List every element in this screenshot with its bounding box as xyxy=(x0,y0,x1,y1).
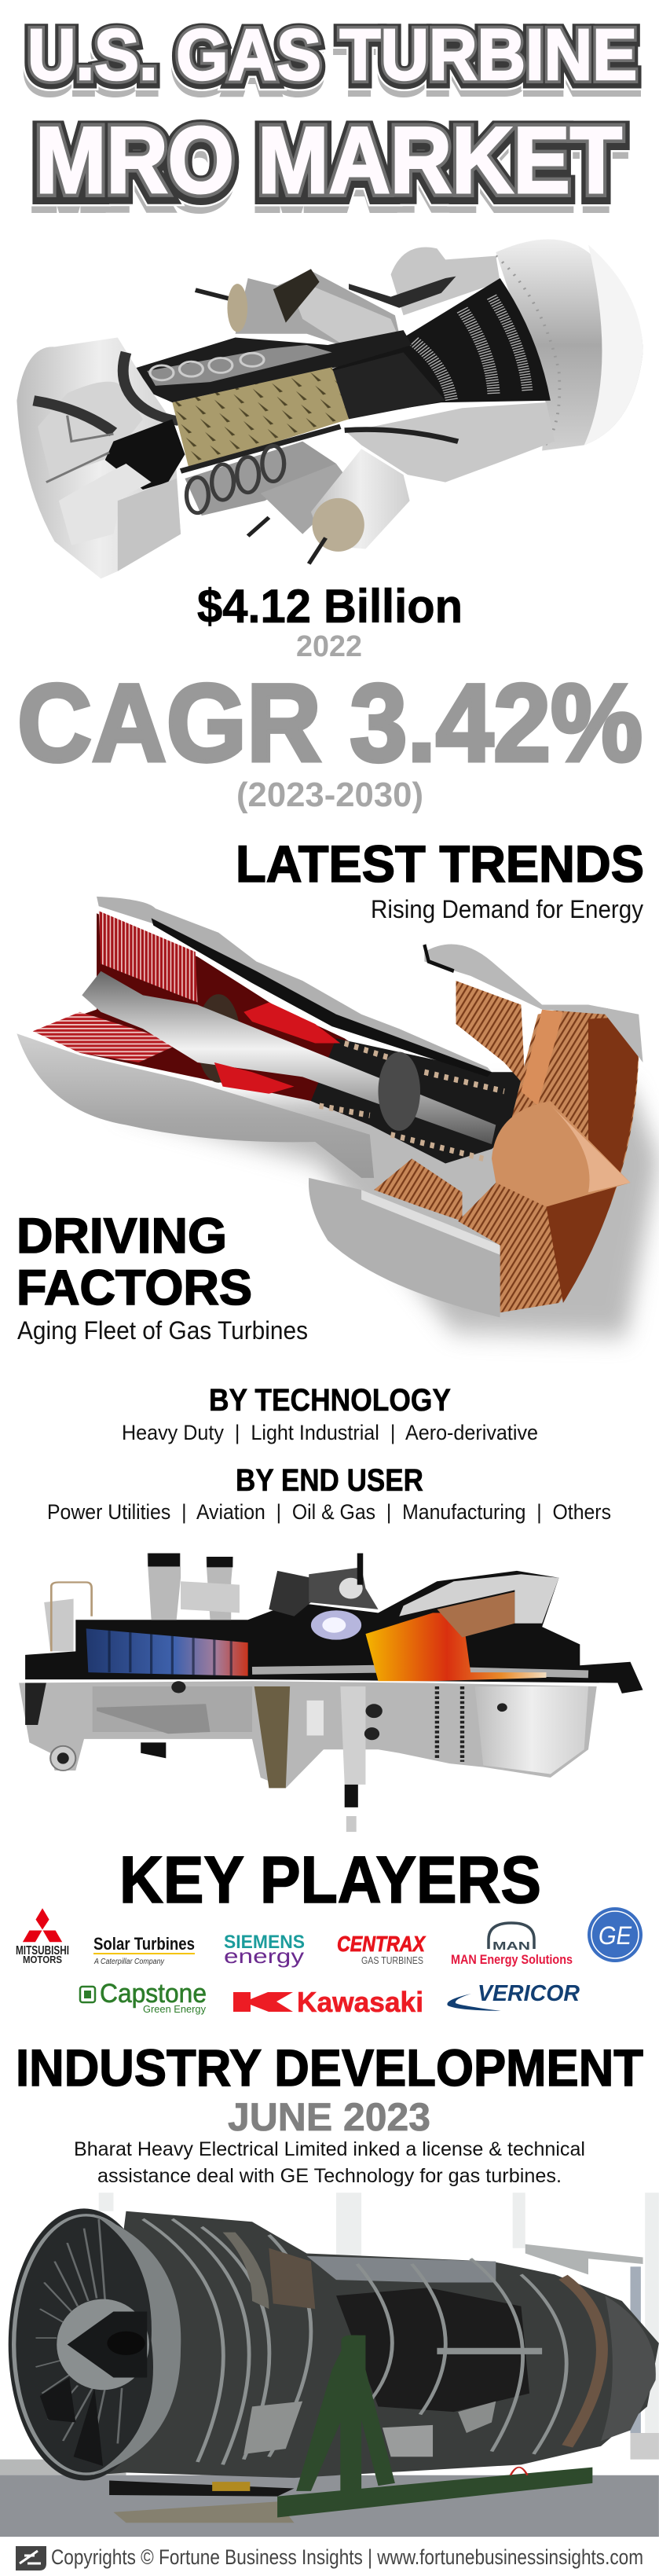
stat: forecast period: (2023-2030) xyxy=(236,776,423,814)
title xyxy=(26,15,637,226)
illustration: gas turbine cutaway with gold compressor xyxy=(16,239,643,578)
development text: Bharat Heavy Electrical Limited inked a license & technical xyxy=(74,2138,585,2160)
development text xyxy=(74,2138,585,2187)
logo: MAN Energy Solutions: MAN Energy Solutions xyxy=(451,1952,573,1967)
logo: Vericor: VERICOR xyxy=(478,1981,580,2006)
logo: GE xyxy=(588,1907,643,1962)
heading xyxy=(16,1209,252,1316)
footer xyxy=(16,2545,643,2570)
section: industry development xyxy=(16,2038,643,2187)
date: JUNE 2023 xyxy=(228,2095,430,2139)
heading: LATEST TRENDS xyxy=(236,835,644,893)
illustration: industrial gas turbine section with flame xyxy=(19,1554,643,1832)
section: by end user xyxy=(47,1463,611,1524)
logo: Mitsubishi Motors: MOTORS xyxy=(23,1954,62,1965)
heading: DRIVING xyxy=(16,1209,227,1264)
logo: Centrax Gas Turbines: GAS TURBINES xyxy=(361,1954,423,1966)
logo: Mitsubishi Motors: MITSUBISHI xyxy=(16,1944,69,1958)
logo: Centrax Gas Turbines: CENTRAX xyxy=(337,1932,427,1956)
logo: Solar Turbines xyxy=(93,1934,195,1966)
stat: base year: 2022 xyxy=(296,630,362,663)
logo: Capstone Green Energy xyxy=(80,1979,207,2015)
factor text: Aging Fleet of Gas Turbines xyxy=(17,1316,308,1345)
illustration: copper and red jet turbine cutaway xyxy=(16,897,659,1337)
heading: BY END USER xyxy=(236,1463,423,1498)
development text: assistance deal with GE Technology for gas turbines. xyxy=(97,2165,562,2187)
section: by technology xyxy=(122,1383,538,1444)
trend text: Rising Demand for Energy xyxy=(371,895,643,923)
segment list: Power Utilities | Aviation | Oil & Gas | Manufacturing | Others xyxy=(47,1500,611,1524)
logo: Solar Turbines: Solar Turbines xyxy=(93,1934,195,1954)
logo: Solar Turbines: A Caterpillar Company xyxy=(93,1958,165,1966)
photo: gas turbine engine on green stand xyxy=(0,2193,659,2537)
logo: Mitsubishi Motors xyxy=(16,1908,69,1965)
icon: Fortune Business Insights logo xyxy=(16,2546,46,2570)
heading: FACTORS xyxy=(16,1260,252,1316)
heading: key players: KEY PLAYERS xyxy=(119,1843,541,1917)
section: driving factors xyxy=(16,1209,308,1345)
logo: Capstone Green Energy: Capstone xyxy=(100,1979,207,2009)
segment list: Heavy Duty | Light Industrial | Aero-derivative xyxy=(122,1421,538,1444)
logo: Centrax Gas Turbines xyxy=(337,1932,427,1966)
logo: Siemens Energy xyxy=(224,1932,305,1968)
logo: GE: GE xyxy=(599,1921,632,1950)
logo: Kawasaki: Kawasaki xyxy=(297,1986,423,2018)
section: latest trends xyxy=(236,835,644,923)
logo: Siemens Energy: SIEMENS xyxy=(224,1932,305,1953)
value: $4.12 Billion xyxy=(197,580,463,633)
logo: Vericor xyxy=(447,1981,580,2011)
logo: Siemens Energy: energy xyxy=(224,1944,304,1968)
logo: Capstone Green Energy: Green Energy xyxy=(143,2003,206,2015)
logos: key players xyxy=(16,1907,643,2018)
logo: MAN Energy Solutions: MAN xyxy=(492,1939,530,1953)
heading: BY TECHNOLOGY xyxy=(209,1383,451,1418)
logo: MAN Energy Solutions xyxy=(451,1923,573,1967)
logo: Kawasaki xyxy=(233,1986,423,2018)
